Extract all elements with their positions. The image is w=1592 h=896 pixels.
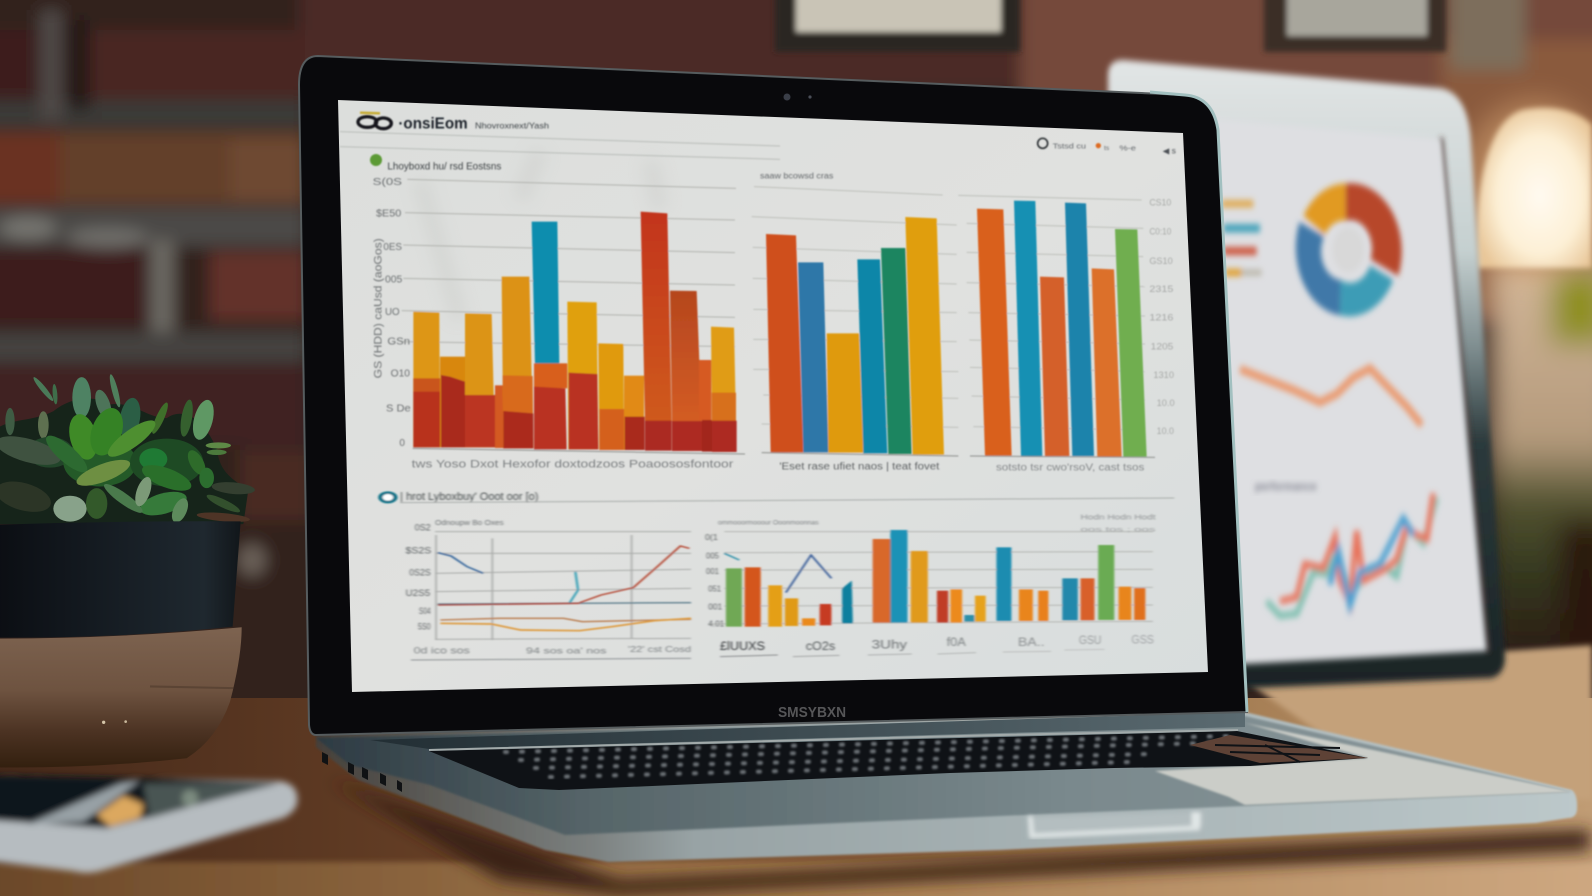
bar 10 xyxy=(641,212,672,451)
desk far right lit area xyxy=(1230,645,1592,800)
wooden desk xyxy=(0,645,1592,896)
toolbar icons and labels: Tstsd cu xyxy=(1053,142,1086,151)
line chart: S04 xyxy=(419,606,431,616)
category labels: 3Uhy xyxy=(872,638,907,651)
y labels: $S2S xyxy=(406,545,431,556)
y labels: 001 xyxy=(706,567,719,576)
hinge band xyxy=(370,712,1245,749)
y labels: 4.01 xyxy=(708,620,724,629)
laptop base shadow xyxy=(330,780,1590,895)
legend bars xyxy=(1222,200,1262,276)
y labels: 0S2 xyxy=(415,522,431,533)
phone screen xyxy=(0,775,280,828)
y-axis labels: S(0S xyxy=(373,177,402,188)
category labels: £lUUXS xyxy=(720,640,765,653)
section title: Lhoyboxd hu/ rsd Eostsns xyxy=(387,161,501,172)
deck surface xyxy=(316,716,1572,835)
succulent plant xyxy=(0,373,255,525)
y labels: 5S0 xyxy=(418,621,431,632)
bar: orange xyxy=(766,234,803,452)
second picture frame on wall xyxy=(1264,0,1446,52)
lamp glow xyxy=(1460,100,1592,280)
background monitor xyxy=(1108,60,1505,697)
laptop base xyxy=(316,712,1577,862)
webcam sensor xyxy=(808,95,812,99)
bar: blue-teal 2 xyxy=(1065,203,1094,456)
wooden ceramic bowl xyxy=(0,627,242,768)
laptop lid bezel xyxy=(299,56,1247,735)
logo xyxy=(358,113,549,133)
bar 2 xyxy=(440,357,466,447)
section title: | hrot Lyboxbuy' Ooot oor [o) xyxy=(400,491,538,503)
dashboard header and top-left chart xyxy=(340,113,780,470)
laptop screen xyxy=(338,100,1208,692)
y labels: 005 xyxy=(706,552,719,561)
right axis labels: 10.0 xyxy=(1157,426,1174,436)
bar: orange 2 xyxy=(1040,277,1069,456)
bar: teal 1 xyxy=(1014,201,1042,456)
monitor screen content xyxy=(1222,183,1437,616)
keyboard xyxy=(429,730,1368,790)
line chart xyxy=(1240,368,1422,425)
bar 6 xyxy=(532,222,567,449)
y-axis labels: 0 xyxy=(399,438,405,449)
bar 5 xyxy=(502,277,533,448)
bar 11 xyxy=(670,291,702,451)
x-axis labels: tws Yoso Dxot Hexofor doxtodzoos Poaoososfontoor xyxy=(412,458,734,470)
bar 9 xyxy=(624,376,645,450)
captions: ommooormooour Ooonmoonnas xyxy=(718,519,819,526)
y-axis labels: S De xyxy=(386,404,411,415)
bottom row of dashboard charts xyxy=(380,491,1174,660)
logo: Nhovroxnext/Yash xyxy=(475,121,549,131)
category labels: cO2s xyxy=(806,640,835,653)
bar 12 xyxy=(699,360,712,452)
category labels xyxy=(720,633,1154,653)
dark upper pot xyxy=(0,521,241,638)
grid lines xyxy=(400,179,736,347)
bar: amber short xyxy=(827,333,863,453)
donut chart xyxy=(1296,183,1402,316)
phone body xyxy=(0,775,297,873)
x axis lines xyxy=(762,453,1155,457)
line chart: '22' cst Cosd xyxy=(628,645,691,654)
bar: amber tall xyxy=(905,217,944,455)
chart caption: saaw bcowsd cras xyxy=(760,172,833,181)
webcam xyxy=(784,94,790,100)
y-axis labels: O10 xyxy=(391,369,410,380)
lamp base and wall glow xyxy=(1490,262,1592,662)
bar 3 xyxy=(465,313,495,447)
overlay lines xyxy=(724,553,831,593)
monitor screen edge xyxy=(1441,138,1488,652)
bar: orange 3 xyxy=(1092,268,1122,457)
middle bar chart xyxy=(766,217,944,455)
right axis labels: 1216 xyxy=(1149,313,1173,323)
y labels: 001 xyxy=(708,603,722,612)
category labels: BA.. xyxy=(1018,636,1045,649)
light palm rest xyxy=(1155,723,1572,805)
right axis labels xyxy=(1149,197,1175,436)
toolbar icons and labels: %-e xyxy=(1119,144,1136,153)
y labels xyxy=(705,533,724,629)
toolbar icons and labels: ts xyxy=(1104,145,1110,152)
right axis labels: 10.0 xyxy=(1157,398,1175,408)
y labels: 0S2S xyxy=(409,567,431,578)
caption: Odnoupw Bo Oxes xyxy=(435,519,504,527)
plant in pot and bowl xyxy=(0,373,255,768)
laptop xyxy=(299,56,1590,895)
y-axis labels: GSn xyxy=(387,336,410,347)
category labels: GSU xyxy=(1079,634,1101,647)
category labels: GSS xyxy=(1131,633,1154,646)
right axis labels: 1205 xyxy=(1151,341,1173,351)
mixed bar chart xyxy=(705,513,1156,657)
y-axis labels: 0ES xyxy=(383,242,402,253)
monitor frame xyxy=(1108,60,1505,697)
section bullet xyxy=(380,493,395,502)
right axis labels: C0:10 xyxy=(1149,227,1171,237)
front notch xyxy=(1028,812,1204,837)
bar: orange 1 xyxy=(977,209,1012,456)
screen smudges xyxy=(420,150,660,320)
bar: green xyxy=(881,248,912,454)
x-axis labels: right chart: sotsto tsr cwo'rsoV, cast tsos xyxy=(996,463,1144,474)
section bullet xyxy=(370,154,382,166)
grid xyxy=(708,532,1153,624)
bar 7 xyxy=(567,302,598,449)
bar: teal xyxy=(857,259,887,453)
toolbar icons and labels xyxy=(1038,138,1176,155)
right axis labels: CS10 xyxy=(1149,197,1171,207)
monitor screen xyxy=(1213,118,1487,664)
y labels: U2S5 xyxy=(406,588,430,598)
smartphone on desk xyxy=(0,775,297,873)
y labels: 051 xyxy=(708,585,721,594)
lid right edge highlight xyxy=(1150,92,1247,712)
y-axis title: GS (HDD) caUsd (aoGos) xyxy=(373,238,385,378)
y-axis labels xyxy=(373,177,411,449)
right bar chart xyxy=(977,201,1147,457)
mixed bar chart: oos tos ; oos xyxy=(1081,526,1156,533)
series xyxy=(438,546,691,631)
x axis line xyxy=(413,448,745,454)
brand on chin: SMSYBXN xyxy=(778,704,846,721)
label rules xyxy=(720,649,1105,657)
y-axis labels: $E50 xyxy=(376,209,402,220)
phone screen reflection xyxy=(27,780,273,827)
y labels: 0(1 xyxy=(705,533,718,542)
bar 13 xyxy=(711,327,737,452)
legend labels: Hodn Hodn Hodt xyxy=(1081,513,1156,522)
right axis labels: 2315 xyxy=(1149,284,1173,294)
bar: blue xyxy=(798,262,828,452)
bars xyxy=(726,530,1145,627)
y-axis labels: UO xyxy=(385,307,400,318)
line chart: 94 sos oa' nos xyxy=(526,647,607,656)
right axis labels: GS10 xyxy=(1149,256,1173,266)
lamp shade xyxy=(1476,108,1592,268)
side ports xyxy=(322,752,402,792)
bar 4 xyxy=(495,385,504,448)
lamp and background plant xyxy=(1460,100,1592,662)
section rule xyxy=(400,498,1174,503)
logo: ·onsiEom xyxy=(398,116,468,133)
top middle and right bar charts xyxy=(752,138,1176,474)
desk front foreground band xyxy=(0,862,1592,896)
stacked bar chart xyxy=(413,212,737,452)
multi-colour line chart xyxy=(1267,494,1437,616)
bar 1 xyxy=(413,312,440,447)
monitor text: performance xyxy=(1255,481,1317,494)
line chart xyxy=(406,519,691,660)
grid xyxy=(411,532,691,660)
category labels: f0A xyxy=(947,636,966,649)
x-axis labels: middle chart: 'Eset rase ufiet naos | teat fovet xyxy=(779,461,940,472)
base rim xyxy=(316,712,1577,862)
y labels xyxy=(406,522,431,632)
right axis labels: 1310 xyxy=(1153,370,1174,380)
bar: green xyxy=(1115,229,1147,457)
y-axis labels: 005 xyxy=(385,275,403,286)
bar 8 xyxy=(598,343,624,450)
toolbar icons and labels: ◀ s xyxy=(1163,146,1176,155)
x labels: 0d ico sos xyxy=(414,645,470,656)
picture frame on wall xyxy=(775,0,1020,52)
header rules xyxy=(340,132,780,159)
grid lines xyxy=(752,187,1145,430)
